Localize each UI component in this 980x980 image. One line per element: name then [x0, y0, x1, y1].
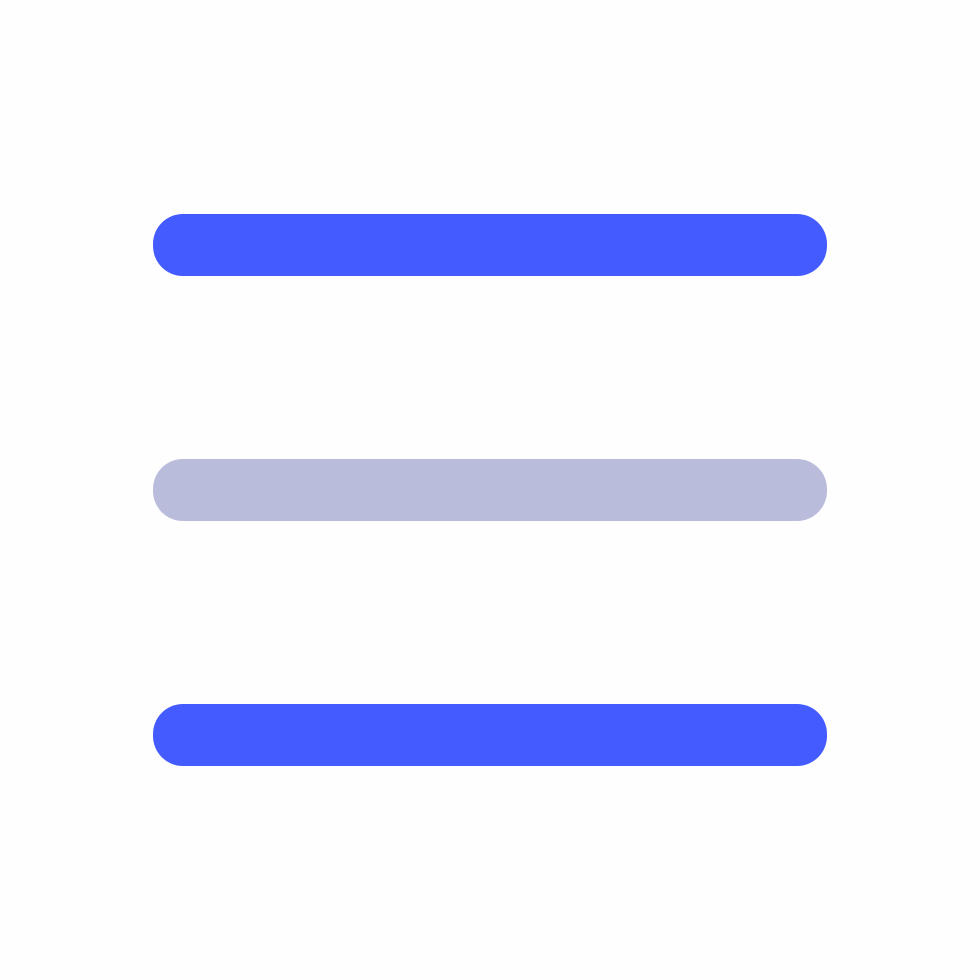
top bar — [153, 214, 827, 276]
middle bar — [153, 459, 827, 521]
bottom bar — [153, 704, 827, 766]
